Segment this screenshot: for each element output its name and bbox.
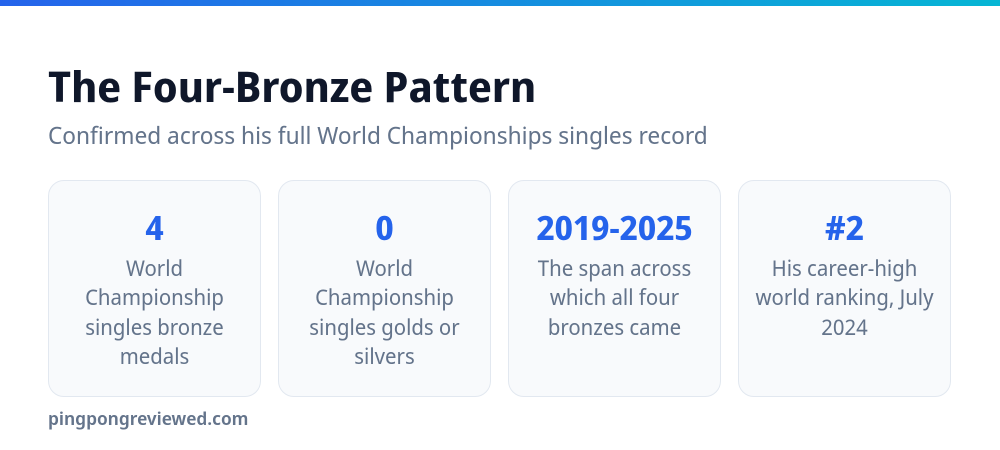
stat label: bronze medals: World Championship singles bronze medals (85, 254, 224, 371)
subtitle: Confirmed across his full World Championships singles record (48, 119, 708, 152)
stat label: golds or silvers: World Championship singles golds or silvers (309, 254, 460, 371)
panel: span stat (508, 180, 721, 397)
panel: bronze medals stat (48, 180, 261, 397)
stat number: 0: 0 (375, 204, 394, 250)
panel: golds or silvers stat (278, 180, 491, 397)
stat label: span: The span across which all four bronzes came (538, 254, 691, 342)
footer source: pingpongreviewed.com (48, 406, 248, 431)
stat number: 4: 4 (145, 204, 164, 250)
stat number: #2: #2 (825, 204, 864, 250)
panel: ranking stat (738, 180, 951, 397)
stat label: ranking: His career-high world ranking, July 2024 (755, 254, 934, 342)
title: The Four-Bronze Pattern (48, 58, 536, 115)
stat number: 2019-2025: 2019-2025 (536, 204, 693, 250)
top gradient bar (0, 0, 1000, 6)
